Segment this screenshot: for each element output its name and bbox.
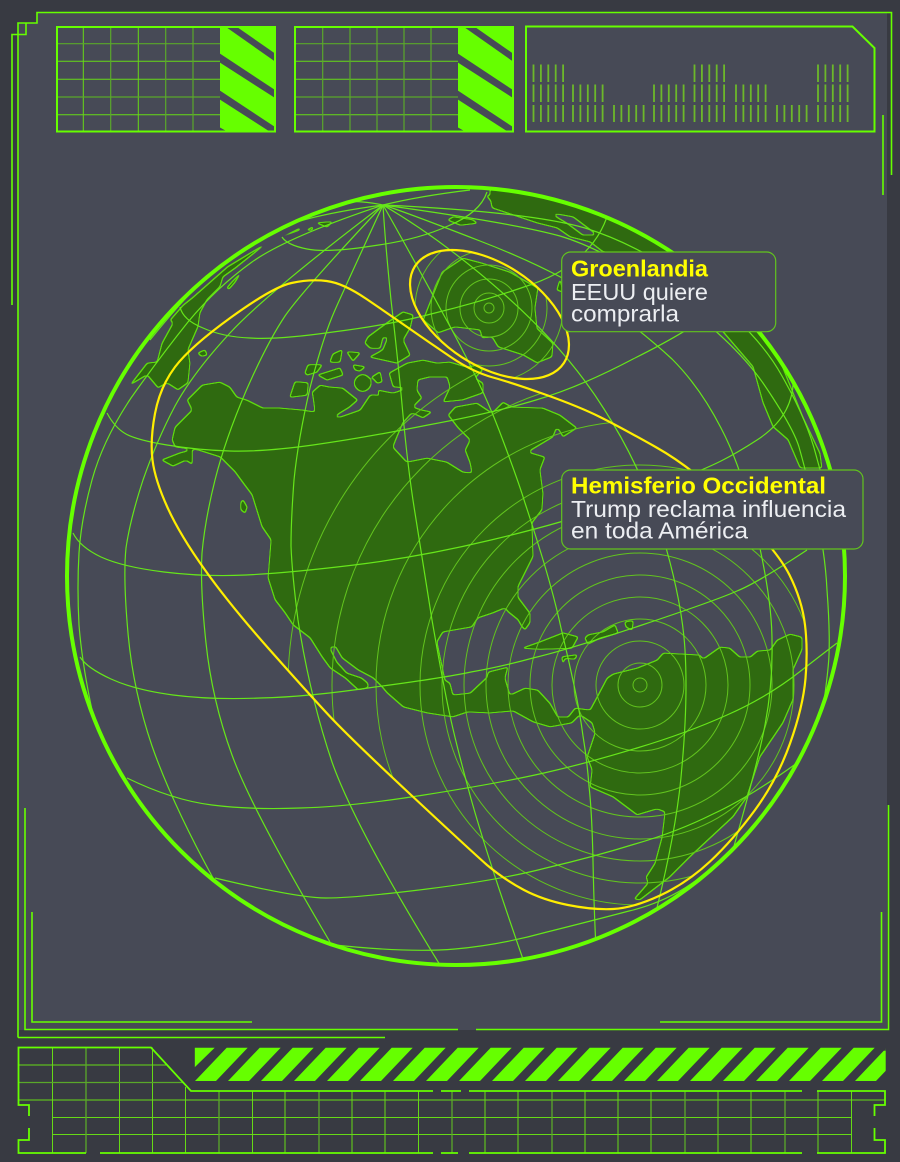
land: Americas <box>172 360 802 900</box>
land: Greenland <box>423 258 553 363</box>
concentric rings: South America <box>288 372 804 906</box>
callout: Groenlandia: comprarla <box>571 300 679 326</box>
callout: Hemisferio Occidental <box>562 470 863 549</box>
land: Siberia limb <box>130 228 300 390</box>
hazard stripe bar <box>195 1047 900 1081</box>
land: islands <box>162 193 633 663</box>
land masses <box>130 189 822 900</box>
globe <box>65 185 847 967</box>
top data panel with bars <box>526 26 874 132</box>
callout: Hemisferio Occidental: Hemisferio Occidental <box>571 472 826 498</box>
top grid panel 1 <box>57 27 275 135</box>
meridians <box>78 190 829 965</box>
callout: Groenlandia: Groenlandia <box>571 256 708 282</box>
yellow outline: Hemisferio Occidental <box>152 280 807 909</box>
callout: Groenlandia <box>562 252 776 332</box>
concentric rings: Greenland <box>414 252 562 378</box>
callout: Hemisferio Occidental: Trump reclama influencia <box>571 496 846 522</box>
top grid panel 2 <box>295 27 513 135</box>
land: Europe and Africa limb <box>490 189 822 468</box>
bottom grid panel <box>18 1048 885 1153</box>
yellow outline: Groenlandia <box>387 223 592 406</box>
callout: Hemisferio Occidental: en toda América <box>571 518 748 544</box>
globe thick outline <box>67 187 845 965</box>
parallels <box>73 192 837 950</box>
callout: Groenlandia: EEUU quiere <box>571 279 708 305</box>
